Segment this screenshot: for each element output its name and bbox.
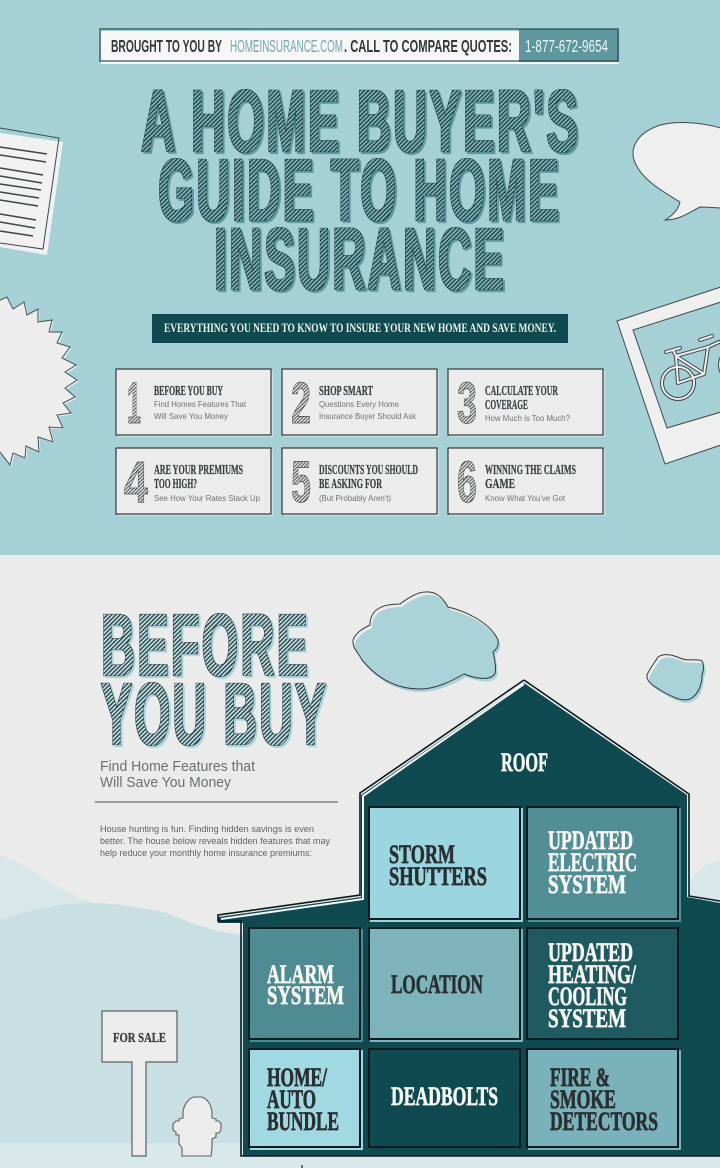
window: alarm system: ALARM	[267, 960, 334, 989]
window: home auto bundle	[249, 1049, 363, 1150]
card 1: 1	[127, 371, 141, 436]
window: alarm system	[249, 928, 363, 1042]
card 2: Insurance Buyer Should Ask	[319, 412, 417, 421]
card 5: DISCOUNTS YOU SHOULD	[319, 462, 418, 477]
roof label: ROOF	[501, 748, 548, 777]
window: home auto bundle: HOME/	[267, 1063, 328, 1092]
card 3: CALCULATE YOUR	[485, 383, 558, 398]
subheading: Find Home Features that	[100, 759, 255, 775]
icon: starburst	[0, 297, 78, 466]
window: updated electric system: SYSTEM	[548, 870, 626, 899]
window: fire and smoke detectors: FIRE &	[550, 1063, 610, 1092]
card 5: 5	[291, 450, 311, 515]
icon: polaroid with bicycle	[617, 287, 720, 464]
heading: before you buy: YOU BUY	[101, 666, 328, 763]
window: updated heating cooling system: HEATING/	[548, 960, 637, 989]
window: storm shutters	[369, 807, 523, 922]
for sale sign: FOR SALE	[113, 1031, 166, 1046]
window: storm shutters: SHUTTERS	[389, 862, 487, 891]
card 1: BEFORE YOU BUY	[154, 383, 223, 398]
window: home auto bundle: BUNDLE	[267, 1107, 339, 1136]
icon: small cloud	[647, 655, 706, 703]
window: updated heating cooling system	[527, 928, 678, 1039]
top bar: brought to you by: 1-877-672-9654	[525, 36, 608, 56]
panel: teal header background	[0, 0, 720, 555]
window: fire and smoke detectors: DETECTORS	[550, 1107, 658, 1136]
main title	[141, 73, 580, 308]
card 3: 3	[457, 371, 477, 436]
card 3: COVERAGE	[485, 397, 528, 412]
card 4	[116, 448, 273, 516]
top bar: brought to you by: HOMEINSURANCE.COM	[230, 36, 343, 56]
bicycle	[662, 336, 720, 399]
banner: subtitle: EVERYTHING YOU NEED TO KNOW TO INSURE YOUR NEW HOME AND SAVE MONEY.	[164, 320, 556, 335]
top bar: brought to you by: BROUGHT TO YOU BY	[111, 36, 222, 56]
house	[218, 680, 720, 1156]
subheading	[100, 759, 255, 791]
window: alarm system: SYSTEM	[267, 981, 344, 1010]
icon: speech bubble	[633, 123, 720, 220]
card 1: Find Homes Features That	[154, 400, 247, 409]
card 2	[282, 369, 439, 437]
banner: subtitle	[152, 314, 568, 343]
card 4: TOO HIGH?	[154, 476, 197, 491]
panel: light lower background	[0, 555, 720, 1168]
card 2: 2	[291, 371, 311, 436]
card 6: WINNING THE CLAIMS	[485, 462, 576, 477]
window: deadbolts	[369, 1049, 520, 1147]
top bar: brought to you by: . CALL TO COMPARE QUOTES:	[344, 36, 512, 56]
card 6: GAME	[485, 476, 515, 491]
window: deadbolts: DEADBOLTS	[391, 1082, 498, 1111]
top bar: brought to you by	[100, 29, 619, 64]
heading: before you buy	[101, 597, 328, 763]
intro paragraph: help reduce your monthly home insurance premiums:	[100, 848, 312, 858]
window: updated electric system	[527, 807, 681, 922]
card 2: Questions Every Home	[319, 400, 400, 409]
window: updated electric system: UPDATED	[548, 826, 633, 855]
window: updated heating cooling system: COOLING	[548, 982, 627, 1011]
card 4: See How Your Rates Stack Up	[154, 494, 261, 503]
card 5: BE ASKING FOR	[319, 476, 382, 491]
window: updated electric system: ELECTRIC	[548, 848, 637, 877]
card 6	[448, 448, 605, 516]
house roof outline	[524, 680, 720, 901]
card 1	[116, 369, 273, 437]
card 4: 4	[124, 450, 148, 515]
house body	[218, 683, 720, 1156]
card 3: How Much is Too Much?	[485, 414, 571, 423]
window: fire and smoke detectors: SMOKE	[550, 1085, 616, 1114]
card 2: SHOP SMART	[319, 383, 373, 398]
window: fire and smoke detectors	[527, 1049, 681, 1150]
card 6: Know What You've Got	[485, 494, 566, 503]
background hills	[0, 855, 720, 1168]
window: storm shutters: STORM	[389, 840, 455, 869]
intro paragraph: better. The house below reveals hidden features that may	[100, 836, 330, 846]
window: home auto bundle: AUTO	[267, 1085, 316, 1114]
intro paragraph	[100, 824, 330, 858]
window: updated heating cooling system: SYSTEM	[548, 1004, 626, 1033]
icon: fire hydrant	[173, 1097, 221, 1156]
window: location: LOCATION	[391, 970, 483, 999]
card 4: ARE YOUR PREMIUMS	[154, 462, 243, 477]
icon: large cloud	[353, 592, 500, 692]
card 6: 6	[457, 450, 477, 515]
subheading: Will Save You Money	[100, 775, 232, 791]
card 5	[282, 448, 439, 516]
for sale sign	[102, 1011, 177, 1156]
window: location	[369, 928, 523, 1042]
card 3	[448, 369, 605, 437]
icon: document	[0, 128, 63, 255]
window: updated heating cooling system: UPDATED	[548, 938, 633, 967]
card 1: Will Save You Money	[154, 412, 228, 421]
heading: before you buy: BEFORE	[101, 597, 310, 694]
card 5: (But Probably Aren't)	[319, 494, 391, 503]
intro paragraph: House hunting is fun. Finding hidden savings is even	[100, 824, 314, 834]
